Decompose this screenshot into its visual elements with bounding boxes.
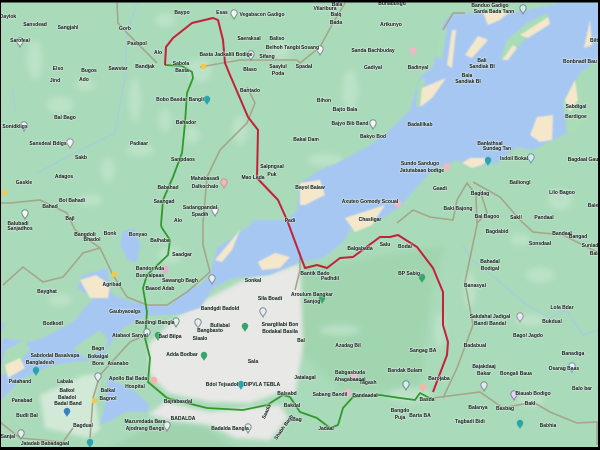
place labels: south: Bag (292, 417, 302, 423)
place labels: Balq (331, 12, 341, 18)
place labels: Badinyal (408, 65, 429, 71)
place labels: south: Bodigal (481, 266, 500, 272)
place labels: south: Banasyal (464, 283, 487, 289)
place labels: south: Sonsdaal (529, 241, 552, 247)
place labels: south: Shabh Bagh (273, 414, 295, 441)
islands (0, 13, 585, 375)
place labels: south: Slaalo (193, 336, 207, 342)
place labels: Elso (53, 66, 63, 72)
place labels: Sundag Tan (483, 146, 511, 152)
place labels: south: Balgabada (347, 246, 373, 252)
place labels: south: Babhia (540, 423, 557, 429)
place labels: south: Jatalagal (294, 375, 316, 381)
place labels: Daylok (0, 14, 16, 20)
place labels: Ado (79, 77, 89, 83)
place labels: south: Sila Boadi (258, 296, 283, 302)
place labels: Banduo Gadigo (471, 3, 509, 9)
place labels: Bal Bagoo (475, 214, 499, 220)
place labels: south: Bandi Bandal (474, 321, 507, 327)
place labels: south: Bunyalpaas (136, 273, 164, 279)
place labels: Sarda Bada Tann (474, 9, 514, 15)
place labels: south: Bangad (569, 234, 587, 240)
place labels: Sawstar (108, 66, 128, 72)
place labels: south: Atabaol Sanyal (112, 333, 149, 339)
place labels: south: BP Sabig (398, 271, 420, 277)
place labels: south: Basbag (496, 406, 514, 412)
place labels: Bugos (81, 68, 97, 74)
place labels: Chasligar (359, 217, 381, 223)
place labels: Bada (330, 20, 342, 26)
place labels: south: Sabang Bandil (313, 392, 348, 398)
place labels: Isdoil Bokal (500, 156, 529, 162)
place labels: south: Balhaba (150, 238, 170, 244)
place labels: Balubadi (7, 221, 29, 227)
place labels: Puk (267, 172, 277, 178)
place labels: south: Badal Band (54, 401, 82, 407)
place labels: Bunadusgd (378, 1, 406, 7)
place labels: Baypo (174, 10, 190, 16)
place labels: south: Bodakal Basila (262, 329, 298, 335)
place labels: south: Sanjadhos (7, 226, 33, 232)
place labels: south: Bonk (104, 231, 116, 237)
place labels: south: Babgasbuda (335, 370, 365, 376)
place labels: Bagdabid (486, 229, 508, 235)
place labels: south: Sala (248, 359, 258, 365)
place labels: south: Sunlad (582, 243, 598, 249)
place labels: Bihon (317, 98, 331, 104)
route: red (165, 18, 448, 392)
place labels: south: Sabdodal Basalvapa (31, 353, 80, 359)
place labels: south: Bangladesh (26, 360, 54, 366)
place labels: Bagdag (471, 191, 489, 197)
place labels: Sosang (301, 45, 319, 51)
place labels: south: Sanjal (1, 434, 16, 440)
place labels: Saaylul (269, 64, 287, 70)
place labels: south: Panabad (12, 398, 32, 404)
place labels: Bale (588, 203, 598, 209)
place labels: Salpngsal (260, 164, 284, 170)
place labels: south (1, 226, 600, 447)
place labels: Sifang (259, 54, 275, 60)
place labels: Sanpdaos (171, 157, 195, 163)
rivers (12, 3, 597, 335)
place labels: Bonbnadl Bau (563, 59, 597, 65)
place labels: Belhoh Tangbi (266, 45, 301, 51)
place labels: south: Bajakdaaj (472, 364, 496, 370)
place labels: south: Bukdual (542, 319, 562, 325)
place labels: Sangjahl (58, 25, 79, 31)
place labels: south: Basda (419, 397, 435, 403)
place labels: south: Jadaal (318, 426, 334, 432)
place labels: Bakyo Bod (360, 134, 386, 140)
place labels: south: Salu (380, 242, 390, 248)
place labels: Bandjak (135, 64, 155, 70)
place labels: Bardigoe (565, 114, 587, 120)
place labels: south: Agribad (103, 282, 121, 288)
place labels: south: Bullabal (210, 323, 230, 329)
place labels: Bajyo Bib Band (332, 121, 368, 127)
place labels: Basta (175, 68, 189, 74)
place labels: Mao Lada (241, 175, 265, 181)
place labels: Bajto Bala (333, 107, 357, 113)
place labels: south: Baladol (58, 395, 77, 401)
place labels: Poda (272, 71, 284, 77)
place labels: Sansdeal Bdigs (29, 141, 67, 147)
place labels: south: Bala (590, 251, 600, 257)
place labels: south: Bagnol (100, 396, 117, 402)
place labels: Sakll (510, 215, 522, 221)
route: green (143, 65, 433, 428)
water: lakes (0, 228, 150, 425)
place labels: south: Saadik (261, 403, 273, 420)
place labels: Bahador (176, 120, 196, 126)
place labels: south: Tagash (359, 380, 377, 386)
place labels: Arikunyo (380, 22, 402, 28)
place labels: south: Balanya (468, 405, 488, 411)
place labels: south: Lola Bdar (550, 305, 574, 311)
place labels: south: Puja (395, 415, 405, 421)
place labels: south: Bangbasto (197, 328, 223, 334)
place labels: south: Apollo Bal Bada (109, 376, 147, 382)
place labels: south: Bora (92, 361, 104, 367)
place labels: south: Bahadal (480, 259, 500, 265)
place labels: Sarofeal (10, 38, 30, 44)
place labels: south: Dsarag Baas (549, 366, 579, 372)
place labels: south: Bal (297, 338, 306, 344)
highway markers (2, 64, 206, 403)
place labels: south: Baaod Adab (146, 286, 174, 292)
place labels: Sabola (173, 61, 189, 67)
place labels: south: Bandor Ada (136, 266, 164, 272)
place labels: south: Bodkodl (43, 321, 64, 327)
place labels: Lilo Bagoo (549, 190, 575, 196)
place labels: Esas (216, 10, 228, 16)
place labels: Jind (50, 78, 60, 84)
place labels: Mahabasadi (191, 176, 220, 182)
place labels: south: Snarglilabi Bon (262, 322, 298, 328)
place labels: south: Bhadol (84, 237, 101, 243)
place labels: Alo (174, 218, 182, 224)
place labels: Spadal (296, 64, 313, 70)
place labels: south: Sakdahal Jadigal (470, 314, 511, 320)
place labels: Bagdaal Gau (568, 157, 598, 163)
place labels: south: Bayghat (37, 289, 57, 295)
place labels: Gadiyal (364, 65, 383, 71)
place labels: Jatutabaao bodige (400, 168, 444, 174)
place labels: south: Bad Bilpa (158, 334, 182, 340)
place labels: Baliso (269, 36, 285, 42)
place labels: Sonidkligs (2, 124, 28, 130)
urban area (148, 264, 303, 440)
place labels: south: Ajodrang Bangs (126, 426, 165, 432)
place labels: south: Jatadab Babadagaal (21, 441, 70, 447)
place labels: south: Bangdo (391, 408, 409, 414)
place labels: Bobo Basdar Bangli (156, 97, 204, 103)
place labels: Saangad (154, 199, 174, 205)
place labels: south: Bakdal (284, 403, 301, 409)
place labels: south: Patahand (9, 379, 31, 385)
place labels: Blaso (243, 67, 257, 73)
place labels: Sandiak Bl (469, 64, 495, 70)
place labels: Vegabacon Gadigo (239, 12, 285, 18)
place labels: south: Sangag BA (410, 348, 437, 354)
place labels: south: Balo bar (572, 386, 592, 392)
place labels: south: Tagbadi Bidi (455, 419, 485, 425)
place labels: south: Budli Bal (16, 413, 38, 419)
place labels: south: Balkol (59, 388, 75, 394)
place labels: Sundo Sandugo (401, 161, 439, 167)
place labels: Basta Jadkalili Bodige (199, 52, 253, 58)
place labels: south: Bodal (398, 244, 413, 250)
place labels: south: Basdingi Bangla (135, 320, 175, 326)
place labels: Babahad (157, 185, 179, 191)
place labels: Gaadi (433, 186, 448, 192)
settlements: west bank (40, 375, 100, 438)
place labels: Padi (285, 218, 296, 224)
place labels: south: Sanjog (304, 299, 320, 305)
place labels: Sabdigal (566, 104, 587, 110)
place labels: Adagos (55, 174, 73, 180)
place labels: south: Bandak Bulam (388, 368, 423, 374)
place labels: south: Bandaal (552, 231, 572, 237)
place labels: Bahad (42, 204, 58, 210)
place labels: south: Asanabo (107, 361, 129, 367)
place labels: south: Mazumdada Bara (124, 419, 166, 425)
place labels: south: Badalda Bangla (211, 426, 249, 432)
place labels: south: Bokalgal (88, 354, 109, 360)
place labels: south: Ahagabaaoal (334, 377, 366, 383)
place labels: south: Sawangb Bagh (162, 278, 198, 284)
place labels: south: Banadiga (562, 351, 584, 357)
place labels: Saeraksal (237, 36, 261, 42)
place labels: Baki Bajong (444, 206, 472, 212)
place labels: south: Padhdil (321, 276, 340, 282)
place labels: Bal Bago (54, 115, 76, 121)
place labels: Sakb (75, 155, 87, 161)
place labels: south: Adda Bodbar (166, 352, 198, 358)
place labels: Bailiongl (509, 180, 531, 186)
place labels: south: Bongali Baua (500, 371, 532, 377)
place labels (0, 1, 598, 235)
place labels: south: Bonyao (129, 232, 147, 238)
place labels: Pasbpol (127, 41, 147, 47)
place labels: south: Bangdoli (74, 232, 96, 238)
place labels: south: Saadgar (172, 252, 192, 258)
place labels: Vilaribura (314, 6, 337, 12)
place labels: south: Bajrabasdal (164, 399, 193, 405)
place labels: Bakal Dam (293, 137, 319, 143)
place labels: Sanda Bachbuday (351, 48, 395, 54)
place labels: Bala (462, 73, 472, 79)
place labels: south: DIPVLA TEBLA (244, 382, 280, 388)
place labels: south: Gaubyaoalgs (109, 309, 141, 315)
place labels: south: Badabual (464, 343, 487, 349)
place labels: Bantado (240, 88, 260, 94)
place labels: south: Bandaadal (352, 393, 378, 399)
place labels: south: Bagol Jagdo (513, 333, 543, 339)
place labels: Dalkochalo (192, 184, 218, 190)
place labels: south: Bantik Bado (300, 271, 330, 277)
place labels: south: Labala (57, 379, 73, 385)
place labels: south: BADALDA (171, 416, 196, 422)
place labels: Spadih (192, 212, 208, 218)
place labels: Bayol Balaw (295, 185, 325, 191)
place labels: south: Hospital (125, 384, 145, 390)
place labels: Gorb (119, 26, 131, 32)
place labels: south: Bakl (525, 401, 536, 407)
place labels: south: Azadag Bil (335, 343, 361, 349)
place labels: south: Balsabd (277, 391, 297, 397)
place labels: Bala (332, 2, 342, 8)
place labels: Bajl (65, 216, 75, 222)
place labels: Axuteo Gomody Scoual (342, 199, 399, 205)
place labels: south: Bakar (477, 371, 491, 377)
place labels: south: Bagn (92, 346, 104, 352)
place labels: Badalilkab (407, 122, 433, 128)
place labels: south: Bagdual (73, 423, 93, 429)
place labels: Bilt (590, 38, 598, 44)
place labels: south: Sonkal (245, 278, 262, 284)
place labels: south: Barojaba (428, 376, 450, 382)
place labels: south: Biauab Bodigo (515, 391, 551, 397)
place labels: Bol Bahadi (59, 198, 86, 204)
place labels: south: Aroulum Bangkar (291, 292, 333, 298)
place labels: south: Balkal (101, 388, 116, 394)
place labels: Padiaar (130, 141, 148, 147)
place labels: Banlathsal (477, 141, 503, 147)
place labels: Sandiak Bl (455, 79, 481, 85)
place labels: Alo (154, 50, 162, 56)
place labels: Sansdead (23, 22, 47, 28)
place labels: Sadangpandal (183, 205, 218, 211)
place labels: south: Bdol Tejsadol (206, 382, 239, 388)
place labels: Pandaal (534, 215, 554, 221)
place labels: south: Barta BA (409, 413, 431, 419)
place labels: Gaskle (16, 180, 32, 186)
place labels: Bali (477, 58, 487, 64)
place labels: south: Bandgdi Badold (201, 306, 239, 312)
